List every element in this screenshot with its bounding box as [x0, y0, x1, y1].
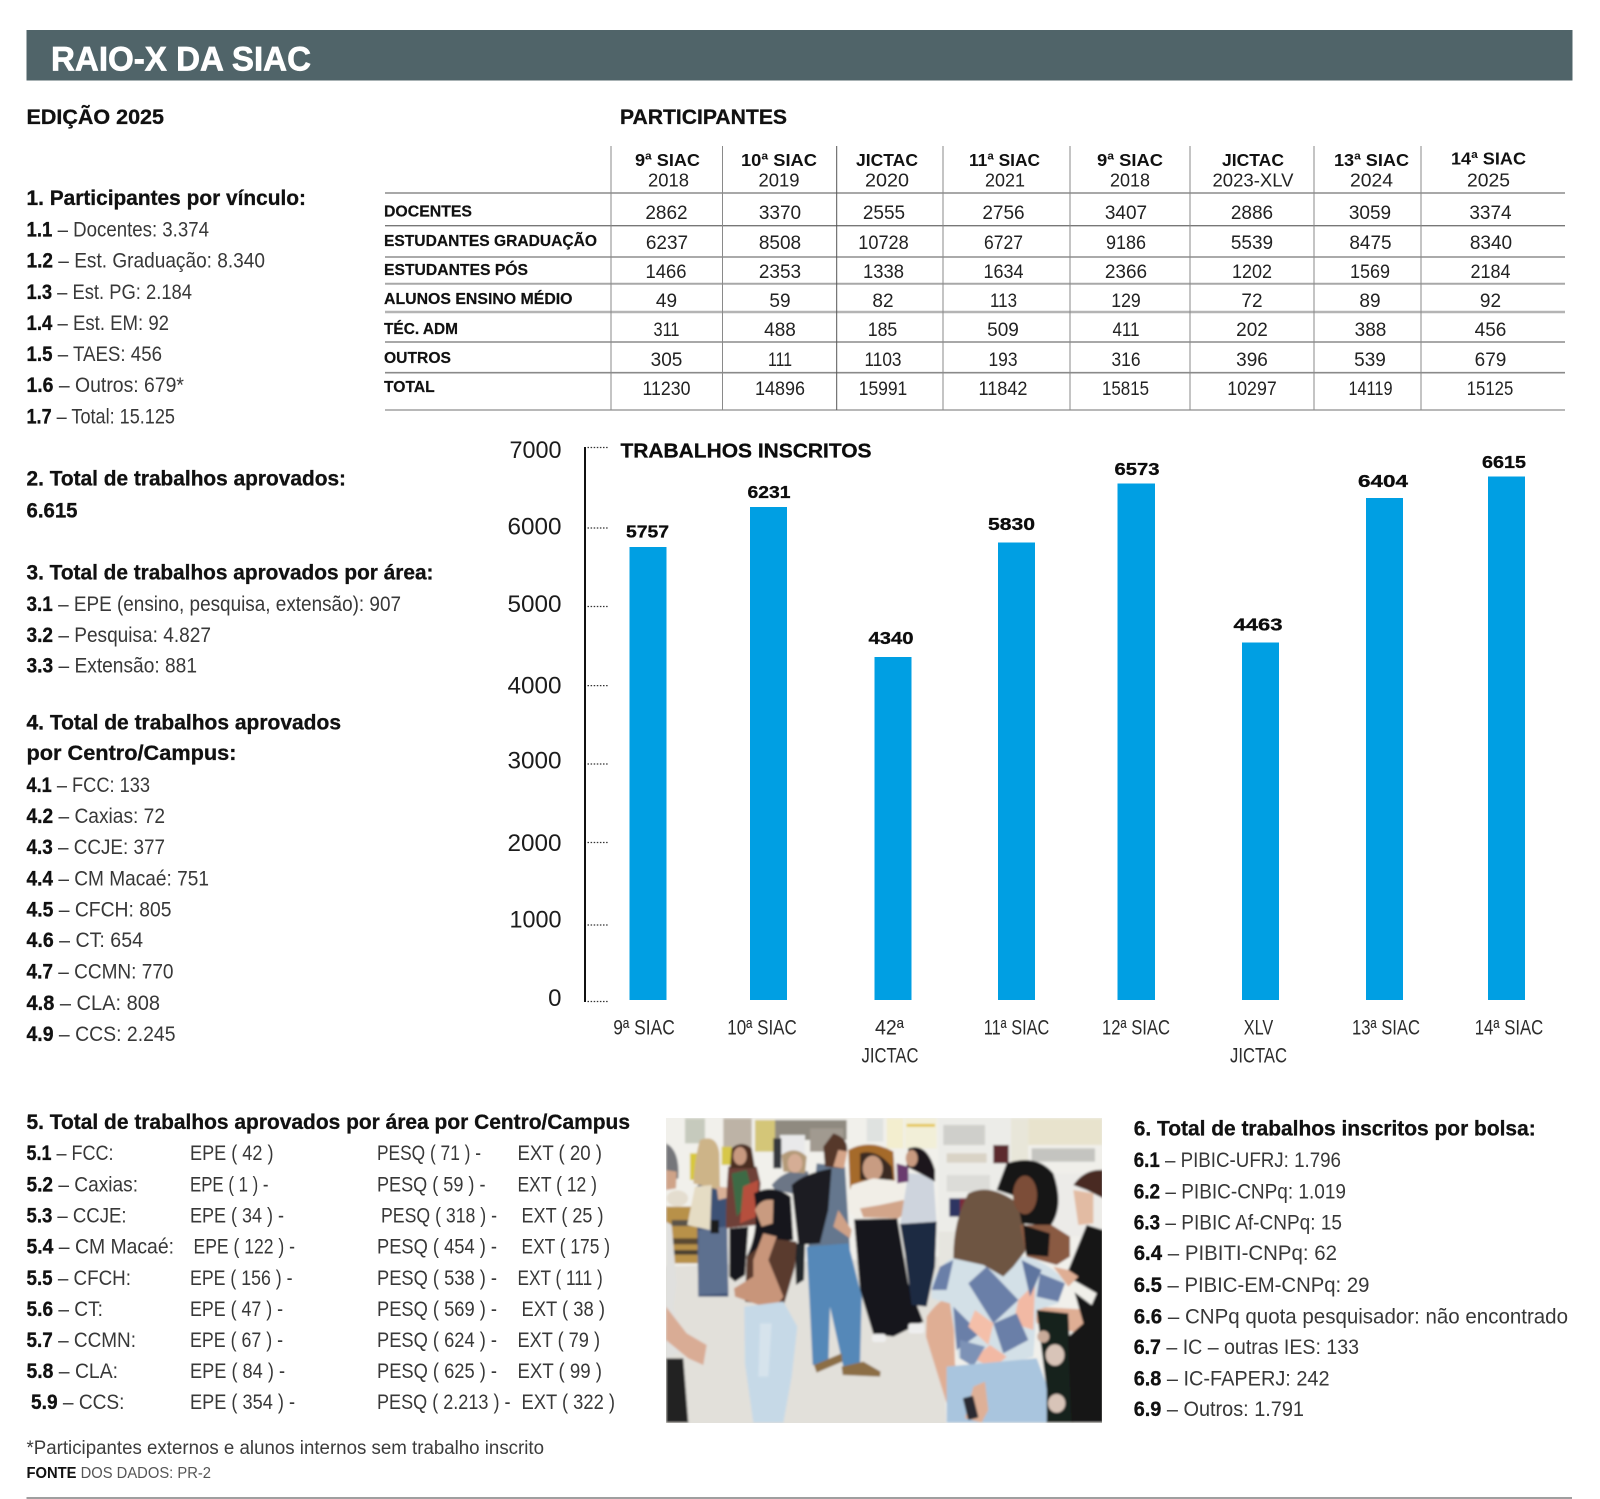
table row: total: 15125 [1467, 379, 1513, 400]
heading: edition: EDIÇÃO 2025 [26, 106, 164, 129]
row 5.6: EXT ( 38 ) [522, 1298, 605, 1321]
y axis: 1000 [510, 906, 562, 934]
table row: alunos ensino medio: 59 [769, 291, 791, 312]
row 5.7: 5.7 – CCMN: [26, 1329, 136, 1352]
row 5.8 [26, 1360, 602, 1383]
row 5.1: 5.1 – FCC: [26, 1142, 114, 1165]
person: woman in white blouse [844, 1145, 924, 1342]
bar values: 4340 [868, 628, 914, 648]
row 5.5: EPE ( 156 ) - [190, 1267, 292, 1290]
table row: estudantes graduacao: 9186 [1106, 233, 1146, 254]
y axis: 3000 [508, 748, 562, 774]
heading: section 1: 1. Participantes por vínculo: [26, 187, 306, 210]
table header row: 9ª SIAC [635, 150, 700, 170]
row 5.2: 5.2 – Caxias: [26, 1174, 138, 1196]
person: back-turned woman in patterned shirt [926, 1190, 1102, 1423]
heading: participants table: PARTICIPANTES [620, 106, 787, 129]
panel: works by scholarship [1134, 1118, 1568, 1421]
row 5.6: PESQ ( 569 ) - [377, 1298, 497, 1321]
table row: total: 15815 [1102, 379, 1149, 400]
panel: approved by centre: 4. Total de trabalhos aprovados [26, 712, 341, 735]
panel: approved by centre: 4.1 – FCC: 133 [26, 774, 150, 797]
panel: total approved: 2. Total de trabalhos aprovados: [26, 468, 346, 491]
panel: approved by centre: 4.3 – CCJE: 377 [26, 836, 165, 859]
table header row: 2023-XLV [1212, 169, 1294, 190]
panel: approved by area: 3.1 – EPE (ensino, pesquisa, extensão): 907 [26, 593, 401, 616]
table row: estudantes graduacao: 8475 [1349, 233, 1392, 254]
panel: approved by centre: 4.5 – CFCH: 805 [26, 898, 172, 921]
table row: estudantes pos: 2353 [759, 262, 801, 283]
panel: participants by type: 1.5 – TAES: 456 [26, 343, 162, 366]
y axis: 2000 [508, 830, 562, 857]
table header row: 9ª SIAC [1097, 150, 1163, 170]
x axis labels [613, 1016, 1543, 1067]
table row: outros: 539 [1354, 350, 1386, 371]
x axis labels: 42ª [875, 1016, 904, 1039]
panel: approved by area [26, 562, 434, 677]
row 5.8: EPE ( 84 ) - [190, 1360, 285, 1383]
x axis labels: 12ª SIAC [1102, 1016, 1170, 1039]
panel: approved by centre: 4.4 – CM Macaé: 751 [26, 868, 209, 891]
panel: approved by centre: 4.6 – CT: 654 [26, 929, 143, 952]
table row: estudantes graduacao: 8340 [1470, 233, 1512, 254]
x axis labels: JICTAC [1230, 1044, 1287, 1067]
row 5.3: 5.3 – CCJE: [26, 1205, 126, 1228]
table row: docentes: 2555 [863, 203, 905, 224]
table row: total: 11842 [978, 379, 1028, 400]
row 5.4: EPE ( 122 ) - [194, 1236, 295, 1258]
y axis: 4000 [508, 672, 562, 700]
table row: tecnicos administrativos: 411 [1112, 320, 1140, 341]
y axis: 6000 [508, 514, 562, 540]
table row labels: TÉC. ADM [384, 319, 458, 338]
table row: outros: 679 [1475, 350, 1506, 371]
person: woman with curly black hair [997, 1160, 1073, 1423]
table header row: 2025 [1467, 169, 1510, 190]
table header row: 2020 [865, 169, 909, 190]
table row labels: OUTROS [384, 350, 451, 367]
y axis: 0 [548, 985, 562, 1012]
table header row: JICTAC [1222, 150, 1284, 170]
table row: alunos ensino medio: 129 [1111, 291, 1141, 312]
person: dark-haired girl in brown tee [734, 1189, 797, 1423]
table row: estudantes graduacao: 6237 [646, 233, 688, 254]
row 5.6: 5.6 – CT: [26, 1298, 103, 1321]
bar values: 4463 [1234, 614, 1283, 634]
row 5.8: PESQ ( 625 ) - [377, 1360, 497, 1383]
table row: outros: 1103 [864, 350, 902, 371]
row 5.4: EXT ( 175 ) [522, 1236, 610, 1258]
footnote: *Participantes externos e alunos internos sem trabalho inscrito [26, 1438, 544, 1459]
table header row: 2018 [1110, 169, 1150, 190]
panel: works by scholarship: 6.7 – IC – outras IES: 133 [1134, 1336, 1359, 1359]
table row: tecnicos administrativos: 185 [868, 320, 897, 341]
table row: tecnicos administrativos: 202 [1236, 320, 1268, 341]
row 5.1: EPE ( 42 ) [190, 1142, 274, 1165]
bar values: 5757 [626, 522, 669, 542]
person: blurred man at left edge [666, 1143, 707, 1423]
table row labels: ALUNOS ENSINO MÉDIO [384, 289, 572, 308]
row 5.2: EXT ( 12 ) [518, 1174, 597, 1196]
table row: outros: 305 [651, 350, 682, 371]
y axis [508, 437, 609, 1012]
bar values: 6573 [1114, 459, 1160, 479]
row 5.2 [26, 1174, 597, 1196]
panel: approved by area: 3. Total de trabalhos aprovados por área: [26, 562, 434, 585]
row 5.2: EPE ( 1 ) - [190, 1174, 268, 1196]
table row: total: 14119 [1348, 379, 1392, 400]
panel: participants by type: 1.2 – Est. Graduação: 8.340 [26, 250, 265, 272]
table row: alunos ensino medio: 113 [990, 291, 1017, 312]
panel: participants by type: 1.7 – Total: 15.125 [26, 406, 175, 428]
chart title: TRABALHOS INSCRITOS [620, 441, 872, 463]
row 5.2: PESQ ( 59 ) - [377, 1174, 486, 1196]
panel: works by scholarship: 6.8 – IC-FAPERJ: 242 [1134, 1368, 1330, 1391]
x axis labels: JICTAC [862, 1044, 918, 1067]
panel: approved by area by centre [26, 1111, 630, 1414]
table row: outros: 316 [1112, 350, 1140, 371]
table row: alunos ensino medio: 49 [656, 291, 677, 312]
table row: docentes: 2862 [645, 203, 688, 224]
row 5.9: PESQ ( 2.213 ) - [377, 1391, 510, 1414]
row 5.6 [26, 1298, 605, 1321]
table row labels: ESTUDANTES PÓS [384, 260, 528, 279]
table row labels: ESTUDANTES GRADUAÇÃO [384, 230, 597, 250]
table row: estudantes graduacao [646, 233, 1512, 254]
table header row: 2024 [1350, 169, 1393, 190]
person: man with backpack [792, 1133, 881, 1377]
table row: tecnicos administrativos [654, 320, 1506, 341]
table row: total: 11230 [642, 379, 690, 400]
row 5.1: PESQ ( 71 ) - [377, 1142, 481, 1165]
table row: estudantes pos [646, 262, 1511, 283]
table row: estudantes graduacao: 10728 [858, 233, 909, 254]
bar values: 5830 [988, 514, 1035, 534]
row 5.7: PESQ ( 624 ) - [377, 1329, 497, 1352]
panel: works by scholarship: 6.1 – PIBIC-UFRJ: 1.796 [1134, 1149, 1341, 1172]
row 5.4: 5.4 – CM Macaé: [26, 1236, 174, 1258]
table row: outros: 396 [1236, 350, 1268, 371]
table row: docentes: 3407 [1105, 203, 1147, 224]
row 5.9 [31, 1391, 615, 1414]
table header row: 2018 [648, 169, 689, 190]
bars [630, 476, 1525, 1000]
table header row: 11ª SIAC [969, 150, 1040, 170]
photo frame mask [660, 1112, 1108, 1429]
row 5.5: PESQ ( 538 ) - [377, 1267, 497, 1290]
panel: approved by centre: 4.9 – CCS: 2.245 [26, 1023, 176, 1046]
row 5.3: PESQ ( 318 ) - [381, 1205, 497, 1228]
panel: approved by area: 3.2 – Pesquisa: 4.827 [26, 624, 211, 647]
panel: total approved [26, 468, 346, 522]
panel: works by scholarship: 6.9 – Outros: 1.791 [1134, 1398, 1304, 1421]
table row: alunos ensino medio: 92 [1480, 291, 1501, 312]
bar chart: trabalhos inscritos [508, 437, 1543, 1067]
row 5.7 [26, 1329, 600, 1352]
row 5.3 [26, 1205, 604, 1228]
panel: works by scholarship: 6.4 – PIBITI-CNPq: 62 [1134, 1242, 1337, 1265]
panel: approved by area: 3.3 – Extensão: 881 [26, 654, 197, 677]
table header row: 13ª SIAC [1334, 150, 1409, 170]
table header row: 2019 [758, 169, 800, 190]
table row: tecnicos administrativos: 456 [1475, 320, 1506, 341]
table row: docentes [645, 203, 1512, 224]
row 5.8: EXT ( 99 ) [518, 1360, 602, 1383]
table row: estudantes pos: 1338 [863, 262, 904, 283]
background wall and crowd [685, 1118, 937, 1180]
table row: estudantes graduacao: 8508 [759, 233, 801, 254]
table row: tecnicos administrativos: 388 [1355, 320, 1386, 341]
table row: tecnicos administrativos: 311 [654, 320, 680, 341]
table row: total: 15991 [859, 379, 907, 400]
row 5.5: EXT ( 111 ) [518, 1267, 603, 1290]
panel: approved by centre: 4.8 – CLA: 808 [26, 992, 160, 1015]
person: blonde woman with tote [686, 1137, 730, 1298]
table row: alunos ensino medio: 72 [1241, 291, 1263, 312]
person: woman in grey [772, 1150, 808, 1285]
table header row: 14ª SIAC [1451, 149, 1526, 169]
panel: approved by centre [26, 712, 341, 1046]
row 5.5: 5.5 – CFCH: [26, 1267, 131, 1290]
table row: alunos ensino medio: 89 [1359, 291, 1381, 312]
table row: total: 14896 [755, 379, 805, 400]
person: floral dress [726, 1144, 761, 1282]
bar values: 6615 [1482, 452, 1526, 472]
row 5.5 [26, 1267, 603, 1290]
panel: approved by centre: 4.7 – CCMN: 770 [26, 961, 174, 984]
row 5.1 [26, 1142, 602, 1165]
panel: participants by type: 1.1 – Docentes: 3.374 [26, 218, 209, 242]
row 5.7: EPE ( 67 ) - [190, 1329, 283, 1352]
panel: approved by centre: 4.2 – Caxias: 72 [26, 805, 165, 828]
row 5.1: EXT ( 20 ) [518, 1142, 602, 1165]
table row labels: DOCENTES [384, 204, 472, 221]
table row: docentes: 3370 [759, 203, 801, 224]
x axis labels: 11ª SIAC [984, 1016, 1049, 1039]
panel: works by scholarship: 6.6 – CNPq quota pesquisador: não encontrado [1134, 1306, 1568, 1328]
table row: alunos ensino medio [656, 291, 1501, 312]
x axis labels: 9ª SIAC [613, 1016, 675, 1039]
table row: alunos ensino medio: 82 [872, 291, 894, 312]
title banner [26, 30, 1572, 80]
x axis labels: 10ª SIAC [727, 1016, 797, 1039]
table row: outros: 111 [768, 350, 792, 371]
x axis labels: XLV [1244, 1016, 1273, 1039]
table header row: 2021 [985, 169, 1025, 190]
table row: docentes: 2756 [982, 203, 1025, 224]
panel: total approved: 6.615 [26, 499, 78, 522]
x axis labels: 13ª SIAC [1352, 1016, 1420, 1039]
table row: total: 10297 [1227, 379, 1277, 400]
table: participants [384, 146, 1565, 410]
source: FONTE DOS DADOS: PR-2 [26, 1465, 211, 1482]
table row: docentes: 3059 [1349, 203, 1391, 224]
panel: participants by type: 1.4 – Est. EM: 92 [26, 312, 169, 335]
heading: section 5: 5. Total de trabalhos aprovados por área por Centro/Campus [26, 1111, 630, 1134]
person: woman at right in black [1053, 1170, 1103, 1423]
row 5.9: EXT ( 322 ) [522, 1391, 615, 1414]
panel: participants by type: 1.3 – Est. PG: 2.184 [26, 281, 192, 304]
row 5.4: PESQ ( 454 ) - [377, 1236, 497, 1258]
table row: docentes: 2886 [1231, 203, 1273, 224]
title banner: RAIO-X DA SIAC [51, 40, 311, 78]
bar values: 6231 [748, 482, 791, 502]
table row: estudantes pos: 1634 [984, 262, 1024, 283]
wooden pallet [666, 1190, 698, 1263]
posters [938, 1118, 1102, 1265]
table row: estudantes pos: 1202 [1232, 262, 1272, 283]
panel: approved by centre: por Centro/Campus: [26, 742, 236, 765]
panel: works by scholarship: 6.2 – PIBIC-CNPq: 1.019 [1134, 1180, 1346, 1204]
panel: works by scholarship: 6.5 – PIBIC-EM-CNPq: 29 [1134, 1274, 1369, 1297]
panel: participants by type [26, 187, 306, 428]
table header row: 10ª SIAC [741, 150, 817, 170]
table row: outros [651, 350, 1506, 371]
row 5.7: EXT ( 79 ) [518, 1329, 600, 1352]
y axis: 5000 [508, 591, 562, 618]
table row: estudantes pos: 2366 [1105, 262, 1147, 283]
heading: section 6: 6. Total de trabalhos inscritos por bolsa: [1134, 1118, 1536, 1141]
table row: estudantes graduacao: 5539 [1231, 233, 1273, 254]
row 5.8: 5.8 – CLA: [26, 1360, 118, 1383]
table row: tecnicos administrativos: 488 [764, 320, 796, 341]
table header row: JICTAC [856, 150, 918, 170]
table row: estudantes pos: 1466 [646, 262, 686, 283]
table row: estudantes pos: 1569 [1350, 262, 1390, 283]
table header row [635, 149, 1526, 190]
bar values: 6404 [1358, 471, 1408, 491]
table row: total [642, 379, 1513, 400]
bar values [626, 452, 1526, 648]
row 5.3: EPE ( 34 ) - [190, 1205, 284, 1228]
table row: docentes: 3374 [1469, 203, 1512, 224]
row 5.6: EPE ( 47 ) - [190, 1298, 283, 1321]
y axis: 7000 [510, 437, 562, 464]
person: woman in light grey top [897, 1147, 937, 1307]
row 5.3: EXT ( 25 ) [522, 1205, 604, 1228]
x axis labels: 14ª SIAC [1475, 1016, 1543, 1039]
row 5.9: 5.9 – CCS: [31, 1391, 124, 1414]
row 5.4 [26, 1236, 610, 1258]
table row: estudantes graduacao: 6727 [984, 233, 1023, 254]
panel: participants by type: 1.6 – Outros: 679* [26, 374, 184, 397]
panel: works by scholarship: 6.3 – PIBIC Af-CNPq: 15 [1134, 1212, 1342, 1235]
table row labels [384, 204, 597, 396]
row 5.9: EPE ( 354 ) - [190, 1391, 295, 1414]
table row: estudantes pos: 2184 [1470, 262, 1511, 283]
table row: tecnicos administrativos: 509 [987, 320, 1019, 341]
table row: outros: 193 [988, 350, 1018, 371]
photo: people at the poster session [660, 1110, 1110, 1435]
table row labels: TOTAL [384, 379, 435, 396]
